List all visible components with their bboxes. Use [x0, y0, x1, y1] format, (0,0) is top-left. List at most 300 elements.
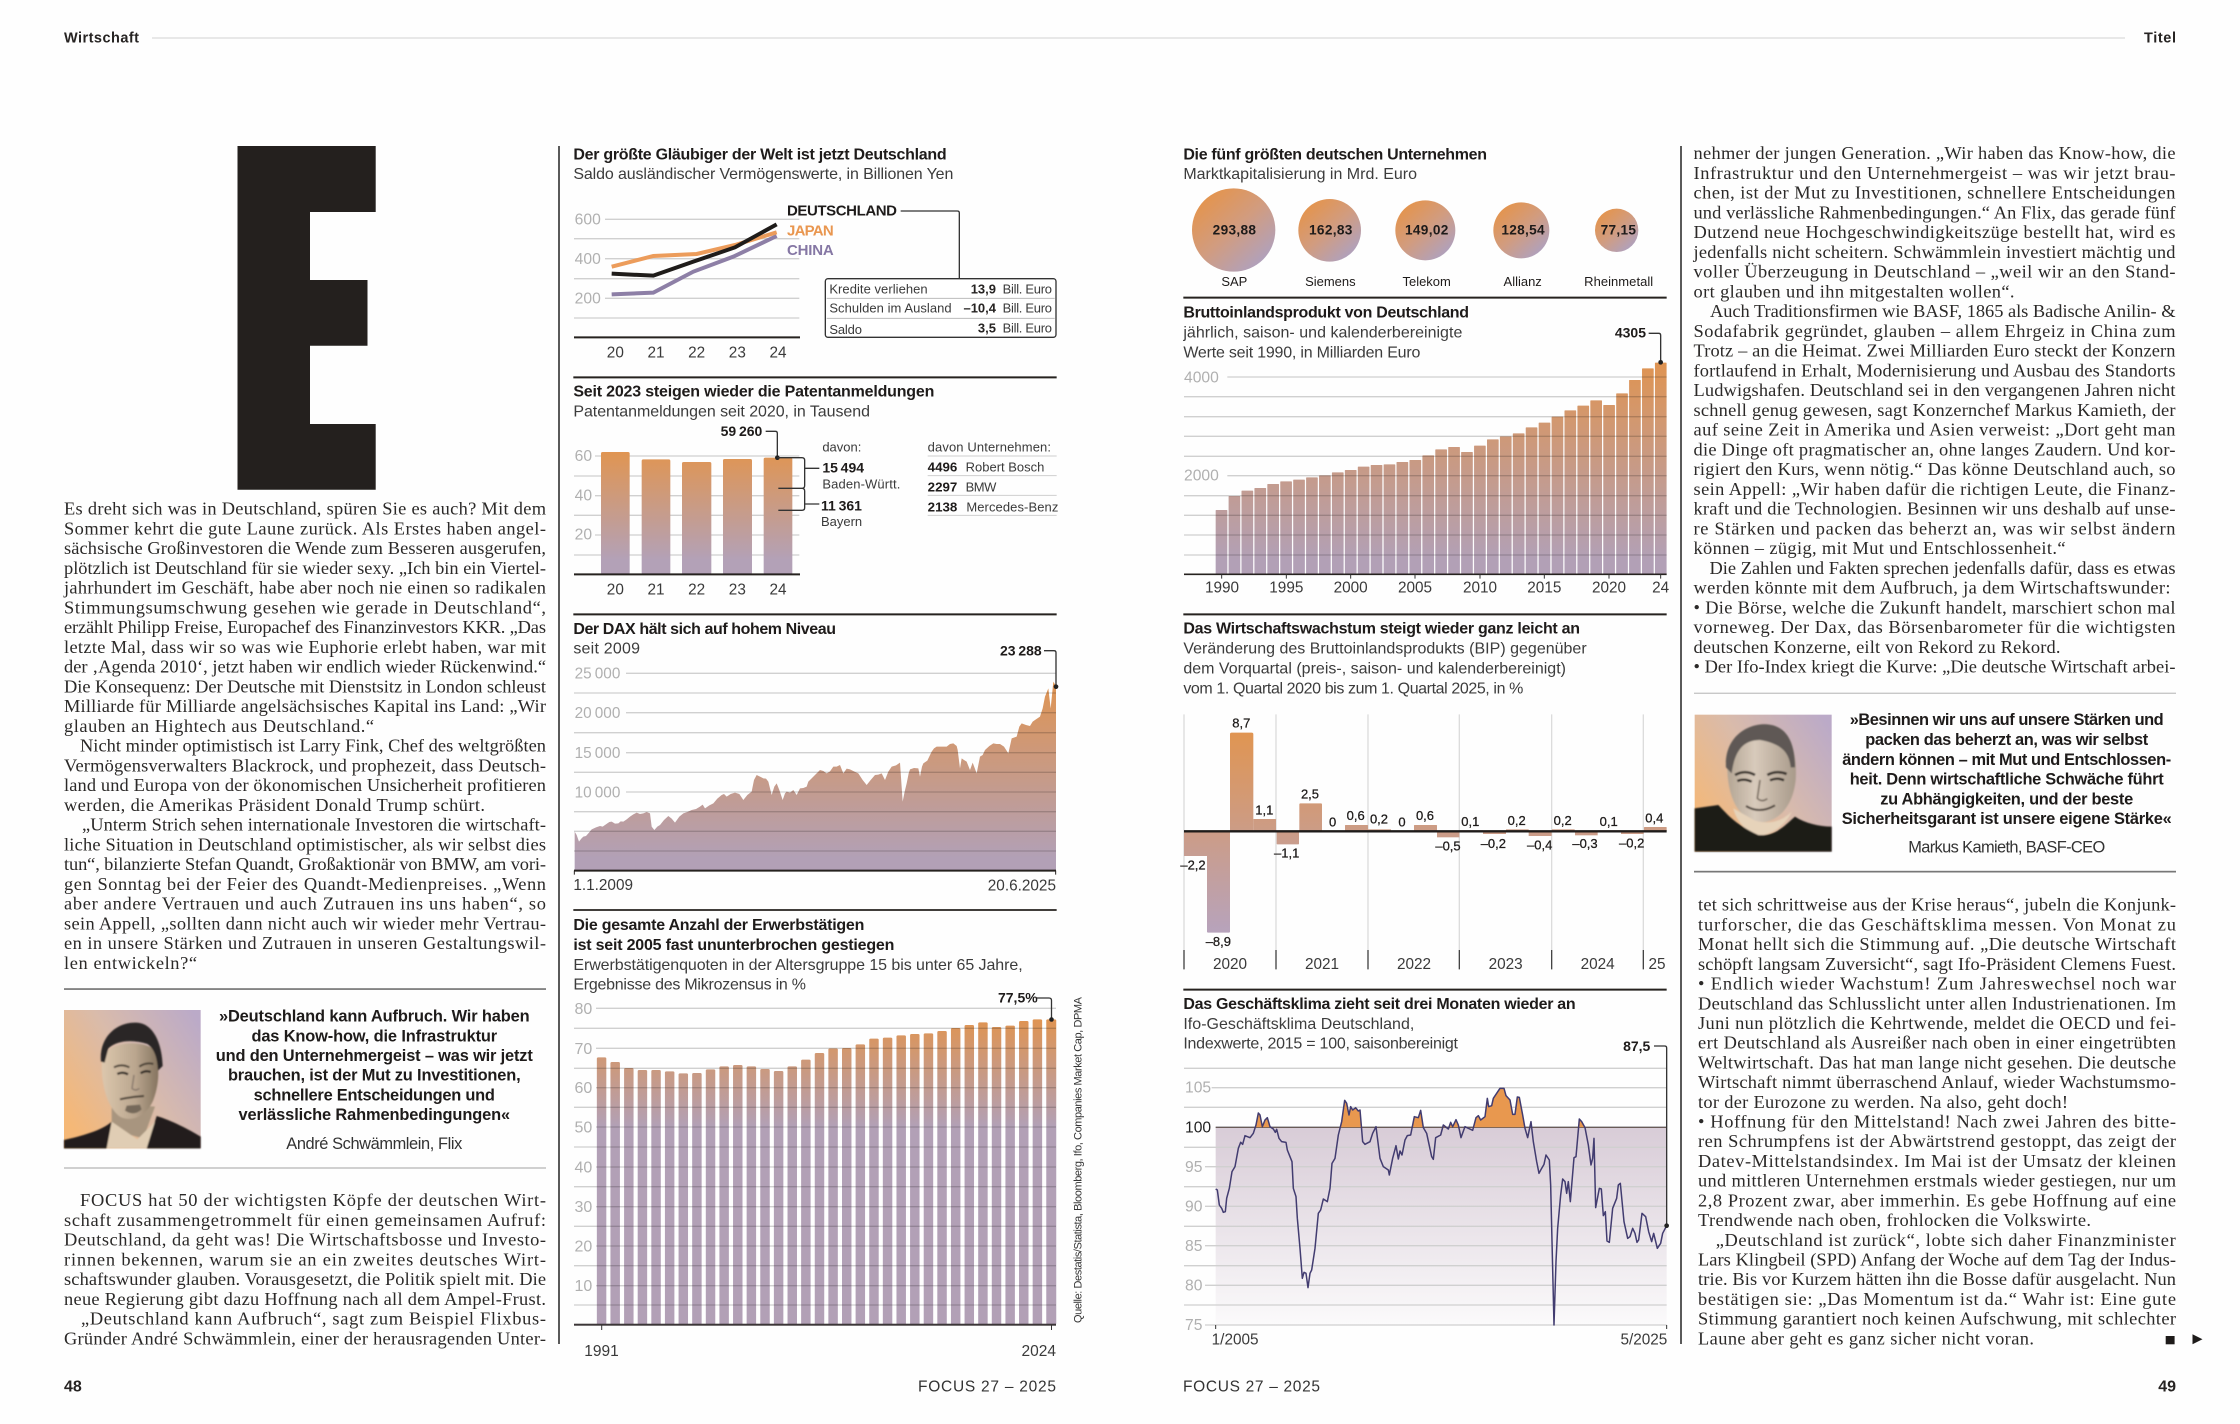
company names: SAP: [1221, 274, 1247, 289]
text block: article opening: Es dreht sich was in Deutschland, spüren Sie es auch? Mit dem: [64, 498, 547, 518]
y axis labels: 60: [575, 448, 592, 465]
value labels: 0: [1329, 815, 1336, 830]
value callout 77,5%: [1037, 998, 1054, 1022]
date labels: [1212, 1331, 1667, 1348]
text block: article opening: plötzlich ist Deutschland für sie wieder sexy. „Ich bin ein Viertel-: [64, 558, 546, 578]
chart 2: Patentanmeldungen bar chart: [573, 377, 1058, 598]
text block: column 4 top: Auch Traditionsfirmen wie BASF, 1865 als Badische Anilin- &: [1710, 301, 2176, 321]
value labels: 0,2: [1554, 813, 1572, 828]
text block: column 4 bottom: ert Deutschland als Ausreißer nach oben in einer eingetrübten: [1698, 1033, 2176, 1053]
text block: column 4 bottom: trie. Bis vor Kurzem hätten ihn die Bosse dafür ausgelacht. Nun: [1698, 1269, 2176, 1289]
text block: column 4 bottom: turforscher, die das Geschäftsklima messen. Von Monat zu: [1698, 914, 2176, 934]
legend labels: [787, 203, 897, 259]
text block: column 4 top: sein Appell: „Wir haben dafür die richtigen Leute, die Finanz-: [1694, 479, 2176, 499]
y axis labels: 95: [1185, 1159, 1203, 1176]
text block: article opening: aber andere Vertrauen und auch Zutrauen ins uns haben“, so: [64, 894, 546, 914]
value callout 87,5: 87,5: [1623, 1038, 1651, 1054]
bars 1991–2024: [597, 1019, 1056, 1325]
y axis labels: 90: [1185, 1199, 1203, 1216]
y axis labels: 80: [574, 1001, 592, 1018]
chart 4 heading: Ergebnisse des Mikrozensus in %: [573, 976, 806, 993]
chart 5 title: Die fünf größten deutschen Unternehmen: [1183, 146, 1487, 163]
value labels: 8,7: [1232, 716, 1250, 731]
breakdown by company: davon Unternehmen:: [928, 440, 1051, 455]
y axis labels: 200: [575, 290, 601, 307]
pull quote: Schwämmlein: André Schwämmlein, Flix: [286, 1135, 463, 1153]
text block: column 4 top: werden könnte mit dem Aufbruch, ja dem Wirtschaftswunder:: [1694, 578, 2170, 598]
y axis labels: 100: [1185, 1119, 1211, 1136]
y axis labels: 15 000: [575, 745, 620, 762]
year labels: 2021: [1305, 956, 1339, 973]
chart 4 heading: Erwerbstätigenquoten in der Altersgruppe 15 bis unter 65 Jahre,: [573, 957, 1023, 974]
text block: column 4 bottom: Datev-Mittelstandsindex. Im Mai ist der Umsatz der kleinen: [1698, 1151, 2176, 1171]
y axis labels: [574, 1001, 592, 1295]
orange area above 100: [1216, 1089, 1666, 1128]
text block: column 4 top: voller Überzeugung in Deutschland – „weil wir an den Stand-: [1694, 262, 2176, 282]
company names: Allianz: [1504, 274, 1542, 289]
text block: article opening: Stimmungsumschwung gesehen wie gerade in Deutschland“,: [64, 597, 546, 617]
x axis labels: 1995: [1269, 580, 1303, 597]
value callout 87,5: [1623, 1038, 1669, 1228]
text block: column 4 top: können – zügig, mit Mut und Entschlossenheit.“: [1694, 538, 2066, 558]
text block: column 4 bottom: ren Schrumpfens ist der Abwärtstrend gestoppt, das zeigt der: [1698, 1131, 2176, 1151]
value labels: 0: [1398, 815, 1406, 830]
source note: Quelle: Destatis/Statista, Bloomberg, Ifo, Companies Market Cap, DPMA: [1072, 996, 1084, 1323]
y axis labels: 105: [1185, 1079, 1211, 1096]
value callout 59260: 59 260: [721, 423, 763, 439]
x axis labels: 2000: [1334, 580, 1368, 597]
breakdown by state: 15 494: [822, 460, 864, 476]
y axis labels: 20: [574, 1238, 592, 1256]
value labels: 0,6: [1416, 808, 1434, 823]
year labels: [1213, 956, 1666, 973]
callout table: [825, 279, 1056, 337]
text block: article opening: land und Europa von der ökonomischen Unsicherheit profitieren: [64, 775, 546, 795]
area below 100: [1216, 1127, 1667, 1325]
x axis labels: 2010: [1463, 580, 1497, 597]
text block: column 4 top: fortlaufend in Erhalt, Modernisierung und Ausbau des Standorts: [1694, 360, 2176, 380]
text block: article opening: liche Situation in Deutschland optimistischer, als wir selbst dies: [64, 834, 546, 854]
text block: article opening: Die Konsequenz: Der Deutsche mit Dienstsitz in London schleust: [64, 676, 546, 696]
text block: FOCUS Aufruf: Gründer André Schwämmlein, einer der herausragenden Unter-: [64, 1328, 546, 1348]
text block: article opening: en in unsere Stärken und Zutrauen in unseren Gestaltungswil-: [64, 933, 546, 953]
text block: column 4 top: Dutzend neue Hochgeschwindigkeitszüge bestellt hat, wird es: [1694, 222, 2176, 242]
y axis labels: [1184, 369, 1219, 485]
chart 1 subtitle: Saldo ausländischer Vermögenswerte, in Billionen Yen: [573, 166, 953, 183]
pull quote: Schwämmlein: das Know-how, die Infrastruktur: [251, 1028, 498, 1046]
text block: column 4 top: • Die Börse, welche die Zukunft handelt, marschiert schon mal: [1694, 597, 2176, 617]
text block: column 4 bottom: • Hoffnung für den Mittelstand! Nach zwei Jahren des bitte-: [1698, 1112, 2176, 1132]
text block: column 4 bottom: Deutschland das Schlusslicht unter allen Industrienationen. Im: [1698, 993, 2177, 1013]
year labels: 25: [1648, 956, 1666, 973]
value labels: 0,2: [1508, 813, 1526, 828]
value labels: –0,4: [1527, 837, 1552, 852]
text block: article opening: sächsische Großinvestoren die Wende zum Besseren ausgerufen,: [64, 538, 546, 558]
continue arrow: [2192, 1334, 2202, 1344]
pull quote: Kamieth: zu Abhängigkeiten, und der beste: [1880, 790, 2133, 808]
year labels: 2020: [1213, 956, 1247, 973]
bars 1990–2024: [1216, 363, 1667, 574]
line: Japan: [612, 232, 777, 267]
text block: column 4 top: jedenfalls nicht scheitern. Schwämmlein investiert mächtig und: [1692, 242, 2176, 262]
text block: FOCUS Aufruf: [64, 1190, 546, 1348]
text block: column 4 bottom: Laune aber geht es ganz sicher nicht voran.: [1698, 1328, 2034, 1348]
chart 7 subtitle: [1183, 640, 1587, 697]
text block: column 4 bottom: [1698, 895, 2177, 1348]
chart 8: Ifo-Geschäftsklima line chart: [1183, 990, 1669, 1348]
header: section label Titel: Titel: [2144, 30, 2176, 46]
value callout 23288: 23 288: [1000, 643, 1042, 659]
text block: article opening: „Unterm Strich sehen internationale Investoren die wirtschaft-: [82, 814, 546, 834]
text block: column 4 bottom: und mittleren Unternehmen erstmals wieder gestiegen, nur um: [1698, 1171, 2177, 1191]
bubble values: 149,02: [1405, 223, 1449, 238]
text block: column 4 bottom: Trendwende nach oben, frohlocken die Volkswirte.: [1698, 1210, 2091, 1230]
text block: article opening: tun“, bilanzierte Stefan Quandt, Großaktionär von BMW, am vori-: [64, 854, 546, 874]
bubbles: [1192, 188, 1638, 272]
text block: column 4 bottom: 2,8 Prozent zwar, aber immerhin. Es gebe Hoffnung auf eine: [1698, 1190, 2176, 1210]
text block: column 4 top: Infrastruktur und den Unternehmergeist – was wir jetzt brau-: [1694, 163, 2176, 183]
bars: [1184, 733, 1667, 933]
y axis labels: 70: [574, 1041, 592, 1058]
pull quote: Schwämmlein: brauchen, ist der Mut zu Investitionen,: [228, 1067, 521, 1085]
brackets: [777, 458, 819, 510]
year labels: 2022: [1397, 956, 1431, 973]
y axis labels: 600: [575, 212, 601, 229]
bars: [601, 452, 792, 574]
value labels: 0,6: [1347, 808, 1365, 823]
y axis labels: [1185, 1079, 1211, 1334]
text block: article opening: Milliarde für Milliarde angelsächsisches Kapital ins Land: „Wir: [64, 696, 546, 716]
text block: FOCUS Aufruf: Deutschland, da geht was! Die Wirtschaftsbosse und Investo-: [64, 1230, 546, 1250]
text block: article opening: der ‚Agenda 2010‘, jetzt haben wir endlich wieder Rückenwind.“: [64, 656, 546, 676]
text block: article opening: jahrhundert im Geschäft, habe aber noch nie einen so radikalen: [63, 578, 546, 598]
chart 8 subtitle: Indexwerte, 2015 = 100, saisonbereinigt: [1183, 1035, 1459, 1052]
footer left: FOCUS 27 – 2025: [918, 1379, 1056, 1396]
text block: column 4 top: Trotz – an die Heimat. Zwei Milliarden Euro steckt der Konzern: [1694, 340, 2176, 360]
y axis labels: 80: [1185, 1277, 1203, 1294]
chart 6 title: Bruttoinlandsprodukt von Deutschland: [1183, 305, 1469, 322]
text block: column 4 bottom: bestätigen sie: „Das Momentum ist da.“ Wahr ist: Eine gute: [1698, 1289, 2176, 1309]
text block: FOCUS Aufruf: schaftswunder glauben. Vorausgesetzt, die Politik spielt mit. Die: [64, 1269, 546, 1289]
text block: FOCUS Aufruf: „Deutschland kann Aufbruch“, sagt zum Beispiel Flixbus-: [81, 1309, 546, 1329]
drop cap letter E: [238, 146, 376, 490]
x axis labels: 24: [1652, 580, 1670, 597]
chart 4 heading: [573, 910, 1057, 1006]
page number 48: 48: [64, 1379, 82, 1396]
text block: column 4 top: nehmer der jungen Generation. „Wir haben das Know-how, die: [1694, 143, 2176, 163]
text block: article opening: [63, 498, 547, 973]
photo: André Schwämmlein: [64, 1010, 201, 1148]
x axis labels: 21: [647, 581, 665, 598]
breakdown by state: 11 361: [821, 498, 862, 514]
text block: column 4 bottom: „Deutschland ist zurück“, lobte sich daher Finanzminister: [1716, 1230, 2176, 1250]
value labels: 0,1: [1600, 814, 1618, 829]
chart 7 subtitle: vom 1. Quartal 2020 bis zum 1. Quartal 2025, in %: [1183, 680, 1523, 697]
value callout 4305: 4305: [1615, 324, 1646, 340]
y axis labels: 2000: [1184, 468, 1219, 485]
pull quote: Schwämmlein: [216, 1008, 533, 1153]
chart 1: größter Gläubiger line chart: [573, 146, 1056, 362]
text block: column 4 top: schnell genug gewesen, sagt Konzernchef Markus Kamieth, der: [1694, 400, 2176, 420]
chart 4 heading: 77,5%: [998, 990, 1038, 1006]
pull quote: Kamieth: Markus Kamieth, BASF-CEO: [1908, 838, 2105, 856]
chart 7 subtitle: dem Vorquartal (preis-, saison- und kalenderbereinigt): [1183, 660, 1566, 677]
text block: column 4 bottom: Monat hellt sich die Stimmung auf. „Die deutsche Wirtschaft: [1698, 934, 2176, 954]
pull quote: Schwämmlein: verlässliche Rahmenbedingungen«: [238, 1106, 510, 1124]
page number 49: 49: [2158, 1379, 2176, 1396]
x axis labels: 1990: [1205, 580, 1239, 597]
value callout 4305: [1615, 324, 1663, 365]
callout table: 3,5: [978, 321, 996, 336]
bubble values: [1213, 223, 1636, 238]
value labels: [1180, 716, 1663, 949]
x axis labels: 22: [688, 345, 705, 362]
footer centre right: FOCUS 27 – 2025: [1183, 1379, 1320, 1396]
breakdown by company: Robert Bosch: [966, 460, 1044, 475]
text block: column 4 top: auf seine Zeit in Amerika und Asien verweist: „Dort geht man: [1694, 420, 2176, 440]
pull quote: Schwämmlein: und den Unternehmergeist – was wir jetzt: [216, 1047, 533, 1065]
x axis labels: [1205, 580, 1670, 597]
chart 6: BIP bar chart: [1182, 298, 1670, 597]
value labels: 1,1: [1255, 802, 1273, 817]
chart 8 subtitle: Ifo-Geschäftsklima Deutschland,: [1183, 1016, 1414, 1033]
text block: column 4 bottom: tor der Eurozone zu werden. Na also, geht doch!: [1698, 1092, 2068, 1112]
value labels: –8,9: [1206, 934, 1231, 949]
y axis labels: 40: [575, 487, 592, 504]
company names: Siemens: [1305, 274, 1356, 289]
pull quote: Kamieth: Sicherheitsgarant ist unsere eigene Stärke«: [1842, 810, 2172, 828]
text block: column 4 top: rigiert den Kurs, wenn nötig.“ Das könne Deutschland auch, so: [1694, 459, 2176, 479]
text block: column 4 bottom: Wirtschaft nimmt überraschend Anlauf, wieder Wachstumsmo-: [1698, 1072, 2176, 1092]
breakdown by company: BMW: [966, 480, 997, 495]
x axis labels: 2020: [1592, 580, 1626, 597]
value callout 23288: [1000, 643, 1058, 689]
text block: column 4 bottom: • Endlich wieder Wachstum! Zum Jahreswechsel noch war: [1698, 974, 2176, 994]
y axis labels: [575, 666, 620, 801]
x axis labels: [607, 581, 787, 598]
y axis labels: 20 000: [575, 705, 620, 722]
chart 2 subtitle: Patentanmeldungen seit 2020, in Tausend: [573, 404, 870, 421]
x axis labels: 22: [688, 581, 705, 598]
text block: column 4 top: deutschen Konzerne, eilt von Rekord zu Rekord.: [1694, 637, 2060, 657]
value labels: –1,1: [1274, 846, 1299, 861]
x axis labels: 20: [607, 345, 624, 362]
value callout 59260: [721, 423, 780, 460]
text block: article opening: erzählt Philipp Freise, Europachef des Finanzinvestors KKR. „Das: [64, 617, 546, 637]
text block: column 4 top: vorneweg. Der Dax, das Börsenbarometer für die wichtigsten: [1694, 617, 2176, 637]
breakdown by company: [928, 440, 1058, 515]
y axis labels: 10: [574, 1278, 592, 1295]
y axis labels: [575, 212, 601, 307]
callout table: 13,9: [971, 281, 996, 296]
DAX area: [575, 682, 1056, 871]
line: China: [612, 236, 777, 294]
chart 3 title: Der DAX hält sich auf hohem Niveau: [573, 621, 836, 638]
chart 8 subtitle: [1183, 1016, 1459, 1052]
pull quote: Schwämmlein: »Deutschland kann Aufbruch. Wir haben: [219, 1008, 530, 1026]
y axis labels: 20: [575, 527, 592, 544]
text block: article opening: len entwickeln?“: [64, 953, 197, 973]
y axis labels: 400: [575, 251, 601, 268]
text block: FOCUS Aufruf: schaft zusammengetrommelt für einen gemeinsamen Aufruf:: [64, 1210, 546, 1230]
breakdown by state: Bayern: [821, 514, 862, 529]
text block: column 4 top: und verlässliche Rahmenbedingungen.“ An Flix, das gerade fünf: [1694, 202, 2176, 222]
text block: column 4 bottom: tet sich schrittweise aus der Krise heraus“, jubeln die Konjunk-: [1698, 895, 2176, 915]
chart 6 subtitle: Werte seit 1990, in Milliarden Euro: [1183, 344, 1420, 361]
y axis labels: 60: [574, 1080, 592, 1097]
x axis labels: 2005: [1398, 580, 1432, 597]
text block: column 4 bottom: Lars Klingbeil (SPD) Anfang der Woche auf dem Tag der Indus-: [1698, 1250, 2176, 1270]
value labels: 0,2: [1370, 811, 1388, 826]
bubble values: 162,83: [1309, 223, 1353, 238]
text block: column 4 bottom: Weltwirtschaft. Das hat man lange nicht gesehen. Die deutsche: [1698, 1052, 2176, 1072]
value labels: –0,5: [1435, 839, 1461, 854]
chart 6 subtitle: jährlich, saison- und kalenderbereinigte: [1182, 324, 1462, 341]
value labels: 2,5: [1301, 786, 1319, 801]
chart 3: DAX area chart: [573, 614, 1058, 895]
chart 8 title: Das Geschäftsklima zieht seit drei Monaten wieder an: [1183, 996, 1576, 1013]
y axis labels: 4000: [1184, 369, 1219, 386]
text block: article opening: werden, die Amerikas Präsident Donald Trump schürt.: [64, 795, 485, 815]
y axis labels: 85: [1185, 1238, 1203, 1255]
text block: article opening: Nicht minder optimistisch ist Larry Fink, Chef des weltgrößten: [80, 736, 546, 756]
date labels: 20.6.2025: [988, 878, 1056, 895]
x axis labels: [607, 345, 787, 362]
text block: FOCUS Aufruf: rinnen bekennen, warum sie an ein zweites deutsches Wirt-: [64, 1249, 546, 1269]
chart 4 heading: Die gesamte Anzahl der Erwerbstätigen: [573, 917, 864, 934]
text block: article opening: Sommer kehrt die gute Laune zurück. Als Erstes haben angel-: [64, 518, 546, 538]
text block: FOCUS Aufruf: FOCUS hat 50 der wichtigsten Köpfe der deutschen Wirt-: [80, 1190, 546, 1210]
breakdown by company: 4496: [928, 460, 957, 475]
line: Deutschland: [612, 224, 777, 276]
chart 5: fünf größte Unternehmen bubbles: [1183, 146, 1653, 289]
chart 4: Erwerbstätige bar chart: [573, 910, 1057, 1360]
callout table: Bill. Euro: [1003, 321, 1052, 336]
legend labels: JAPAN: [787, 223, 834, 240]
x axis labels: 2015: [1527, 580, 1561, 597]
legend labels: CHINA: [787, 242, 834, 259]
callout table: Bill. Euro: [1003, 281, 1052, 296]
header: section label Wirtschaft: Wirtschaft: [64, 30, 139, 46]
y axis labels: 10 000: [575, 784, 620, 801]
text block: article opening: glauben an Hightech aus Deutschland.“: [64, 716, 374, 736]
text block: column 4 bottom: Juni nun plötzlich die Kehrtwende, meldet die OECD und fei-: [1698, 1013, 2176, 1033]
text block: column 4 top: Sodafabrik gegründet, glauben – allem Ehrgeiz in China zum: [1694, 321, 2176, 341]
value labels: –2,2: [1180, 857, 1206, 872]
y axis labels: 30: [574, 1199, 592, 1216]
bubble values: 77,15: [1601, 223, 1636, 238]
chart 7: Wirtschaftswachstum quarterly bars: [1180, 614, 1667, 973]
value labels: –0,2: [1619, 835, 1644, 850]
photo: Markus Kamieth: [1695, 715, 1832, 852]
ifo line: [1216, 1088, 1667, 1325]
text block: column 4 top: re Stärken und packen das beherzt an, was wir selbst ändern: [1694, 518, 2176, 538]
y axis labels: 50: [574, 1120, 592, 1136]
x axis labels: 20: [607, 581, 624, 598]
date labels: 1/2005: [1212, 1331, 1259, 1348]
y axis labels: [575, 448, 592, 544]
text block: column 4 top: die Dinge oft pragmatischer an, ohne langes Zaudern. Und kor-: [1694, 439, 2176, 459]
year labels: 2023: [1489, 956, 1523, 973]
company names: Telekom: [1402, 274, 1451, 289]
chart 1 title: Der größte Gläubiger der Welt ist jetzt Deutschland: [573, 146, 947, 163]
text block: column 4 top: Ludwigshafen. Deutschland sei in den vergangenen Jahren nicht: [1694, 380, 2176, 400]
bubble values: 128,54: [1501, 223, 1545, 238]
text block: column 4 top: • Der Ifo-Index kriegt die Kurve: „Die deutsche Wirtschaft arbei-: [1694, 656, 2176, 676]
breakdown by state: [821, 440, 900, 529]
year labels: 2024: [1581, 956, 1615, 973]
breakdown by company: 2138: [928, 500, 957, 515]
text block: column 4 top: kraft und die Technologien. Besinnen wir uns deshalb auf unse-: [1694, 498, 2176, 518]
x axis labels: [584, 1343, 1056, 1360]
pull quote: Kamieth: ändern können – mit Mut und Entschlossen-: [1842, 751, 2171, 769]
legend labels: DEUTSCHLAND: [787, 203, 897, 220]
pull quote: Kamieth: [1842, 711, 2172, 856]
pull quote: Kamieth: packen das beherzt an, was wir selbst: [1865, 731, 2149, 749]
text block: article opening: sein Appell, „sollten dann nicht auch wir wieder mehr Vertrau-: [64, 913, 546, 933]
text block: article opening: gen Sonntag bei der Feier des Quandt-Medienpreises. „Wenn: [64, 874, 546, 894]
text block: column 4 bottom: Stimmung garantiert noch keinen Aufschwung, mit schlechter: [1698, 1309, 2176, 1329]
y axis labels: 40: [574, 1160, 592, 1176]
chart 3 subtitle: seit 2009: [573, 641, 640, 658]
breakdown by company: Mercedes-Benz: [966, 500, 1058, 515]
pull quote: Kamieth: »Besinnen wir uns auf unsere Stärken und: [1850, 711, 2164, 729]
end mark square: [2166, 1336, 2175, 1344]
callout table: Schulden im Ausland: [829, 301, 952, 316]
breakdown by state: davon:: [822, 440, 861, 455]
breakdown by state: Baden-Württ.: [822, 476, 900, 491]
text block: article opening: Vermögensverwalters Blackrock, und prophezeit, dass Deutsch-: [64, 755, 546, 775]
x axis labels: 23: [729, 581, 746, 598]
date labels: [573, 877, 1056, 895]
x axis labels: 1991: [584, 1343, 619, 1360]
x axis labels: 21: [647, 345, 665, 362]
y axis labels: 25 000: [575, 666, 620, 683]
chart 7 subtitle: Veränderung des Bruttoinlandsprodukts (BIP) gegenüber: [1183, 640, 1587, 657]
value labels: –0,2: [1481, 836, 1506, 851]
x axis labels: 24: [769, 581, 787, 598]
bubble values: 293,88: [1213, 223, 1256, 238]
text block: column 4 top: chen, ist der Mut zu Investitionen, schnellere Entscheidungen: [1694, 182, 2176, 202]
text block: column 4 top: ort glauben und ihn mitgestalten wollen“.: [1694, 281, 2014, 301]
pull quote: Kamieth: heit. Denn wirtschaftliche Schwäche führt: [1850, 770, 2164, 788]
value labels: 0,1: [1461, 814, 1479, 829]
x axis labels: 24: [769, 345, 787, 362]
value labels: –0,3: [1572, 836, 1598, 851]
chart 5 subtitle: Marktkapitalisierung in Mrd. Euro: [1183, 166, 1417, 183]
chart 2 title: Seit 2023 steigen wieder die Patentanmeldungen: [573, 384, 934, 401]
chart 6 subtitle: [1182, 324, 1462, 361]
text block: column 4 bottom: schöpft langsam Zuversicht“, sagt Ifo-Präsident Clemens Fuest.: [1698, 954, 2176, 974]
date labels: 5/2025: [1620, 1331, 1667, 1348]
chart 4 heading: ist seit 2005 fast ununterbrochen gestiegen: [573, 937, 894, 954]
date labels: 1.1.2009: [573, 877, 633, 894]
callout table: Saldo: [829, 322, 862, 337]
text block: article opening: letzte Mal, dass wir so was wie Euphorie erlebt haben, war mit: [64, 637, 546, 657]
text block: column 4 top: [1692, 143, 2176, 676]
text block: FOCUS Aufruf: neue Regierung gibt dazu Hoffnung nach all dem Ampel-Frust.: [64, 1289, 546, 1309]
chart 7 title: Das Wirtschaftswachstum steigt wieder ganz leicht an: [1183, 620, 1580, 637]
pull quote: Schwämmlein: schnellere Entscheidungen und: [254, 1086, 495, 1104]
callout table: –10,4: [963, 301, 997, 316]
breakdown by company: 2297: [928, 480, 957, 495]
company names: Rheinmetall: [1584, 274, 1653, 289]
y axis labels: 75: [1185, 1317, 1203, 1334]
value labels: 0,4: [1645, 811, 1663, 826]
x axis labels: 2024: [1022, 1343, 1056, 1360]
column separators: [558, 146, 1682, 1344]
company names: [1221, 274, 1653, 289]
